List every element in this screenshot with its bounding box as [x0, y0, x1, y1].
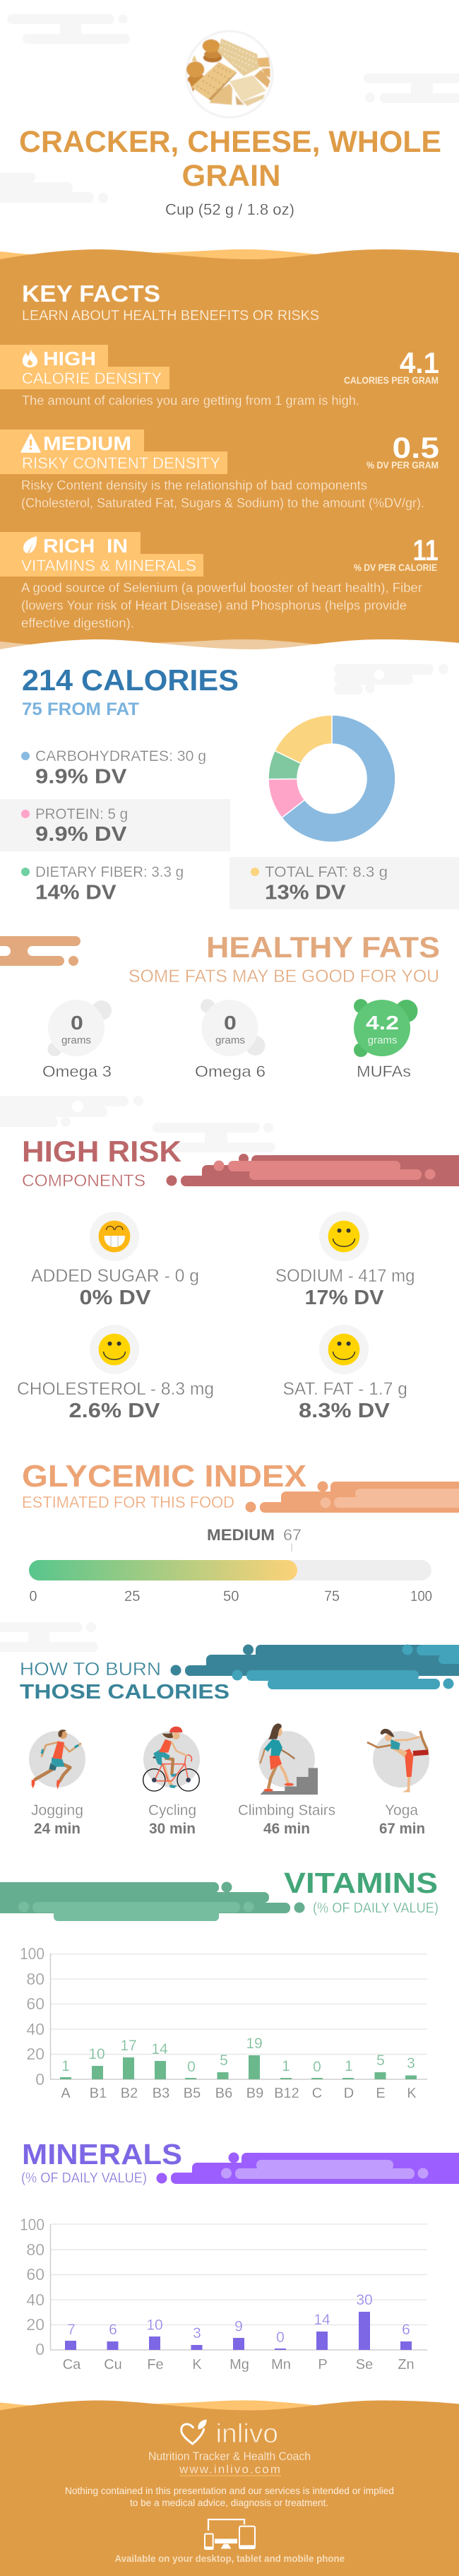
bar chart: vitamins: E	[376, 2086, 386, 2101]
legend: dietary fiber: DIETARY FIBER: 3.3 g	[35, 864, 184, 880]
title: GRAIN	[182, 159, 281, 193]
bar chart: minerals	[20, 2216, 427, 2373]
gauge value	[207, 1526, 302, 1552]
metric: mufas: MUFAs	[357, 1063, 411, 1080]
bar chart: minerals: 80	[26, 2240, 44, 2259]
metric: mufas: 4.2	[366, 1012, 399, 1034]
bar chart: vitamins: 80	[26, 1970, 44, 1988]
metric: omega 3	[42, 1000, 112, 1080]
activity: yoga: 67 min	[379, 1821, 425, 1837]
legend: protein: PROTEIN: 5 g	[35, 806, 128, 822]
availability note: Available on your desktop, tablet and mobile phone	[114, 2553, 345, 2564]
metric: omega 6: 0	[224, 1012, 237, 1034]
serving size: Cup (52 g / 1.8 oz)	[165, 201, 294, 218]
subheading: vitamins: (% OF DAILY VALUE)	[313, 1901, 439, 1916]
bar chart: minerals: Cu	[104, 2357, 122, 2373]
fact: rich in vitamins and minerals: (lowers Your risk of Heart Disease) and Phosphorus (helps provide	[21, 598, 407, 613]
component: added sugar: ADDED SUGAR - 0 g	[31, 1266, 199, 1286]
bar chart: minerals: 40	[26, 2291, 44, 2309]
bar chart: vitamins: 19	[246, 2036, 263, 2052]
bar chart: vitamins: B9	[246, 2086, 263, 2101]
donut chart	[268, 715, 395, 842]
heading: healthy fats: HEALTHY FATS	[206, 930, 440, 964]
fact: rich in vitamins and minerals: % DV PER CALORIE	[354, 562, 437, 573]
logo: inlivo	[181, 2419, 278, 2449]
bar chart: minerals: 0	[276, 2329, 285, 2346]
heading: minerals: MINERALS	[22, 2138, 182, 2170]
bar chart: minerals: 100	[20, 2216, 44, 2234]
bar chart: vitamins: B6	[215, 2086, 232, 2101]
legend: protein	[21, 806, 128, 846]
fact: rich in vitamins and minerals: VITAMINS & MINERALS	[21, 557, 196, 574]
disclaimer: Nothing contained in this presentation and our services is intended or implied	[65, 2485, 394, 2496]
component: sodium: 17% DV	[305, 1287, 384, 1309]
bar chart: vitamins: B2	[121, 2086, 138, 2101]
subheading: estimated: ESTIMATED FOR THIS FOOD	[22, 1493, 234, 1511]
fact: calorie density: 4.1	[400, 346, 439, 379]
activity: yoga	[367, 1729, 429, 1837]
bar chart: minerals: 7	[67, 2322, 76, 2338]
gauge scale: 75	[324, 1588, 340, 1605]
activity: climbing stairs: 46 min	[263, 1821, 310, 1837]
heading: high risk: HIGH RISK	[22, 1135, 181, 1168]
legend: total fat	[251, 864, 388, 904]
icon: cyclist	[143, 1727, 199, 1791]
subheading: components: COMPONENTS	[22, 1171, 145, 1190]
gauge bar	[29, 1560, 431, 1581]
icon: woman climbing stairs	[260, 1723, 318, 1795]
title: CRACKER, CHEESE, WHOLE	[19, 125, 441, 159]
activity: jogging: Jogging	[31, 1802, 83, 1819]
activity: jogging	[29, 1730, 85, 1837]
fact: calorie density: CALORIE DENSITY	[22, 370, 162, 387]
bar chart: minerals: 9	[234, 2319, 243, 2334]
bar chart: minerals: Zn	[398, 2357, 415, 2373]
heading: key facts: KEY FACTS	[22, 280, 160, 307]
panel: footer	[0, 2400, 459, 2576]
fact: risky content density: % DV PER GRAM	[366, 459, 439, 471]
bar chart: vitamins: 60	[26, 1995, 44, 2013]
bar chart: vitamins: 5	[220, 2052, 228, 2069]
legend: carbohydrates	[21, 748, 206, 788]
heading: calories: 214 CALORIES	[22, 663, 239, 697]
fact: rich in vitamins and minerals: effective digestion).	[21, 616, 134, 630]
legend: total fat: TOTAL FAT: 8.3 g	[265, 864, 388, 880]
panel: vitamins	[0, 1867, 439, 2101]
logo: inlivo: inlivo	[216, 2419, 278, 2449]
fact: risky content density: RISKY CONTENT DENSITY	[22, 454, 220, 472]
activity: climbing stairs: Climbing Stairs	[238, 1802, 335, 1819]
metric: omega 6	[195, 999, 266, 1080]
bar chart: vitamins: 3	[407, 2055, 415, 2072]
panel: high risk components	[17, 1135, 459, 1422]
bar chart: minerals: 20	[26, 2315, 44, 2334]
disclaimer: to be a medical advice, diagnosis or treatment.	[130, 2497, 328, 2508]
bar chart: minerals: Se	[356, 2357, 373, 2373]
legend: total fat: 13% DV	[265, 882, 346, 904]
bar chart: vitamins: A	[61, 2086, 71, 2101]
bar chart: vitamins: B12	[274, 2086, 299, 2101]
title	[19, 125, 441, 193]
component: added sugar	[31, 1212, 199, 1309]
metric: omega 3: grams	[61, 1034, 91, 1046]
activity: yoga: Yoga	[385, 1802, 418, 1819]
activity: climbing stairs	[238, 1723, 335, 1837]
icon: flame	[23, 348, 37, 367]
icon: smiling face	[328, 1221, 359, 1252]
activity: cycling	[143, 1727, 200, 1837]
heading: how to burn: HOW TO BURN	[20, 1658, 161, 1679]
bar chart: vitamins: B5	[184, 2086, 201, 2101]
component: cholesterol: CHOLESTEROL - 8.3 mg	[17, 1379, 214, 1399]
bar chart: minerals: 6	[402, 2322, 410, 2338]
bar chart: vitamins: B1	[90, 2086, 107, 2101]
activity: cycling: 30 min	[149, 1821, 196, 1837]
bar chart: vitamins: 14	[151, 2041, 168, 2057]
component: sodium	[275, 1212, 415, 1309]
bar chart: vitamins: K	[407, 2086, 417, 2101]
subheading: minerals: (% OF DAILY VALUE)	[21, 2170, 147, 2186]
food photo: crackers	[186, 31, 273, 117]
panel: how to burn	[20, 1645, 459, 1837]
legend: dietary fiber	[21, 864, 184, 904]
fact: calorie density: HIGH	[43, 348, 96, 370]
icon: smiling face	[328, 1334, 359, 1365]
activity: jogging: 24 min	[34, 1821, 81, 1837]
fact: calorie density	[0, 345, 439, 408]
gauge scale: 0	[30, 1588, 37, 1605]
activity: cycling: Cycling	[148, 1802, 196, 1819]
bar chart: vitamins: 5	[376, 2052, 385, 2069]
icon: jogger	[32, 1730, 81, 1790]
legend: protein: 9.9% DV	[35, 823, 127, 846]
fact: risky content density: (Cholesterol, Saturated Fat, Sugars & Sodium) to the amount (%DV/gr).	[21, 496, 424, 510]
bar chart: vitamins: C	[312, 2086, 322, 2101]
component: cholesterol	[17, 1325, 214, 1422]
component: saturated fat: 8.3% DV	[299, 1400, 391, 1422]
bar chart: minerals: 10	[146, 2317, 163, 2333]
icon: smiling face	[99, 1334, 130, 1365]
subheading: from fat: 75 FROM FAT	[22, 699, 139, 719]
metric: mufas	[354, 999, 418, 1080]
bar chart: vitamins: 10	[88, 2046, 105, 2062]
fact: risky content density: Risky Content density is the relationship of bad components	[21, 478, 367, 492]
heading: glycemic index: GLYCEMIC INDEX	[22, 1459, 306, 1494]
bar chart: vitamins: 1	[61, 2058, 70, 2074]
bar chart: vitamins: 1	[345, 2058, 353, 2074]
subheading: key facts: LEARN ABOUT HEALTH BENEFITS OR RISKS	[22, 308, 319, 324]
fact: rich in vitamins and minerals: RICH IN	[43, 535, 128, 557]
bar chart: vitamins: 40	[26, 2020, 44, 2038]
bar chart: vitamins: 0	[313, 2059, 321, 2075]
bar chart: vitamins: B3	[153, 2086, 169, 2101]
component: saturated fat: SAT. FAT - 1.7 g	[282, 1379, 407, 1399]
metric: omega 3: Omega 3	[42, 1063, 112, 1080]
icon: warning triangle	[21, 434, 40, 452]
gauge scale	[30, 1588, 432, 1605]
bar chart: minerals: Fe	[147, 2357, 164, 2373]
legend: carbohydrates: CARBOHYDRATES: 30 g	[35, 748, 206, 764]
component: added sugar: 0% DV	[79, 1287, 151, 1309]
bar chart: vitamins: 1	[282, 2058, 290, 2074]
icon: devices	[205, 2519, 255, 2549]
panel: key facts	[0, 249, 459, 657]
bar chart: vitamins: 0	[35, 2070, 44, 2088]
bar chart: vitamins	[20, 1944, 427, 2101]
fact: rich in vitamins and minerals: 11	[412, 533, 439, 567]
disclaimer	[65, 2485, 394, 2508]
panel: healthy fats	[0, 930, 440, 1080]
bar chart: minerals: P	[318, 2357, 328, 2373]
fact: calorie density: CALORIES PER GRAM	[344, 374, 439, 386]
legend: dietary fiber: 14% DV	[35, 882, 117, 904]
bar chart: minerals: K	[192, 2357, 202, 2373]
bar chart: minerals: 6	[109, 2322, 117, 2338]
subheading: healthy fats: SOME FATS MAY BE GOOD FOR YOU	[129, 967, 439, 986]
bar chart: vitamins: D	[344, 2086, 354, 2101]
fact: risky content density: MEDIUM	[43, 432, 131, 454]
bar chart: vitamins: 20	[26, 2045, 44, 2063]
bar chart: minerals: 30	[356, 2292, 373, 2308]
component: sodium: SODIUM - 417 mg	[275, 1266, 415, 1286]
bar chart: vitamins: 17	[120, 2038, 137, 2054]
fact: risky content density: 0.5	[393, 431, 439, 464]
gauge scale: 100	[410, 1588, 432, 1605]
panel: minerals	[20, 2138, 459, 2373]
metric: omega 6: grams	[215, 1034, 245, 1046]
gauge scale: 25	[124, 1588, 140, 1605]
metric: mufas: grams	[368, 1034, 398, 1046]
gauge scale: 50	[223, 1588, 239, 1605]
bar chart: minerals: Mn	[271, 2357, 291, 2373]
bar chart: minerals: Ca	[63, 2357, 81, 2373]
bar chart: vitamins: 0	[187, 2059, 196, 2075]
heading: those calories: THOSE CALORIES	[20, 1681, 230, 1703]
bar chart: vitamins: 100	[20, 1944, 44, 1963]
bar chart: minerals: 0	[35, 2340, 44, 2358]
icon: woman in yoga pose	[367, 1729, 429, 1792]
metric: omega 3: 0	[71, 1012, 83, 1034]
gauge value: MEDIUM	[207, 1526, 275, 1544]
component: saturated fat	[282, 1325, 407, 1422]
bar chart: minerals: 3	[193, 2325, 201, 2341]
bar chart: minerals: Mg	[230, 2357, 249, 2373]
website link: www.inlivo.com	[179, 2463, 280, 2476]
fact: rich in vitamins and minerals: A good source of Selenium (a powerful booster of heart health), Fiber	[21, 581, 422, 595]
bar chart: minerals: 14	[314, 2312, 330, 2328]
legend: carbohydrates: 9.9% DV	[35, 766, 127, 788]
gauge value: 67	[283, 1526, 302, 1544]
tagline: Nutrition Tracker & Health Coach	[148, 2450, 311, 2463]
bar chart: minerals: 60	[26, 2265, 44, 2283]
icon: leaf	[23, 536, 37, 553]
icon: grinning face	[99, 1221, 130, 1252]
heading: vitamins: VITAMINS	[284, 1867, 438, 1899]
metric: omega 6: Omega 6	[195, 1063, 266, 1080]
fact: calorie density: The amount of calories you are getting from 1 gram is high.	[22, 394, 359, 408]
component: cholesterol: 2.6% DV	[69, 1400, 160, 1422]
fact: risky content density	[0, 430, 439, 510]
panel: calories	[0, 663, 459, 909]
fact: rich in vitamins and minerals	[0, 532, 439, 630]
panel: glycemic index	[22, 1459, 459, 1605]
